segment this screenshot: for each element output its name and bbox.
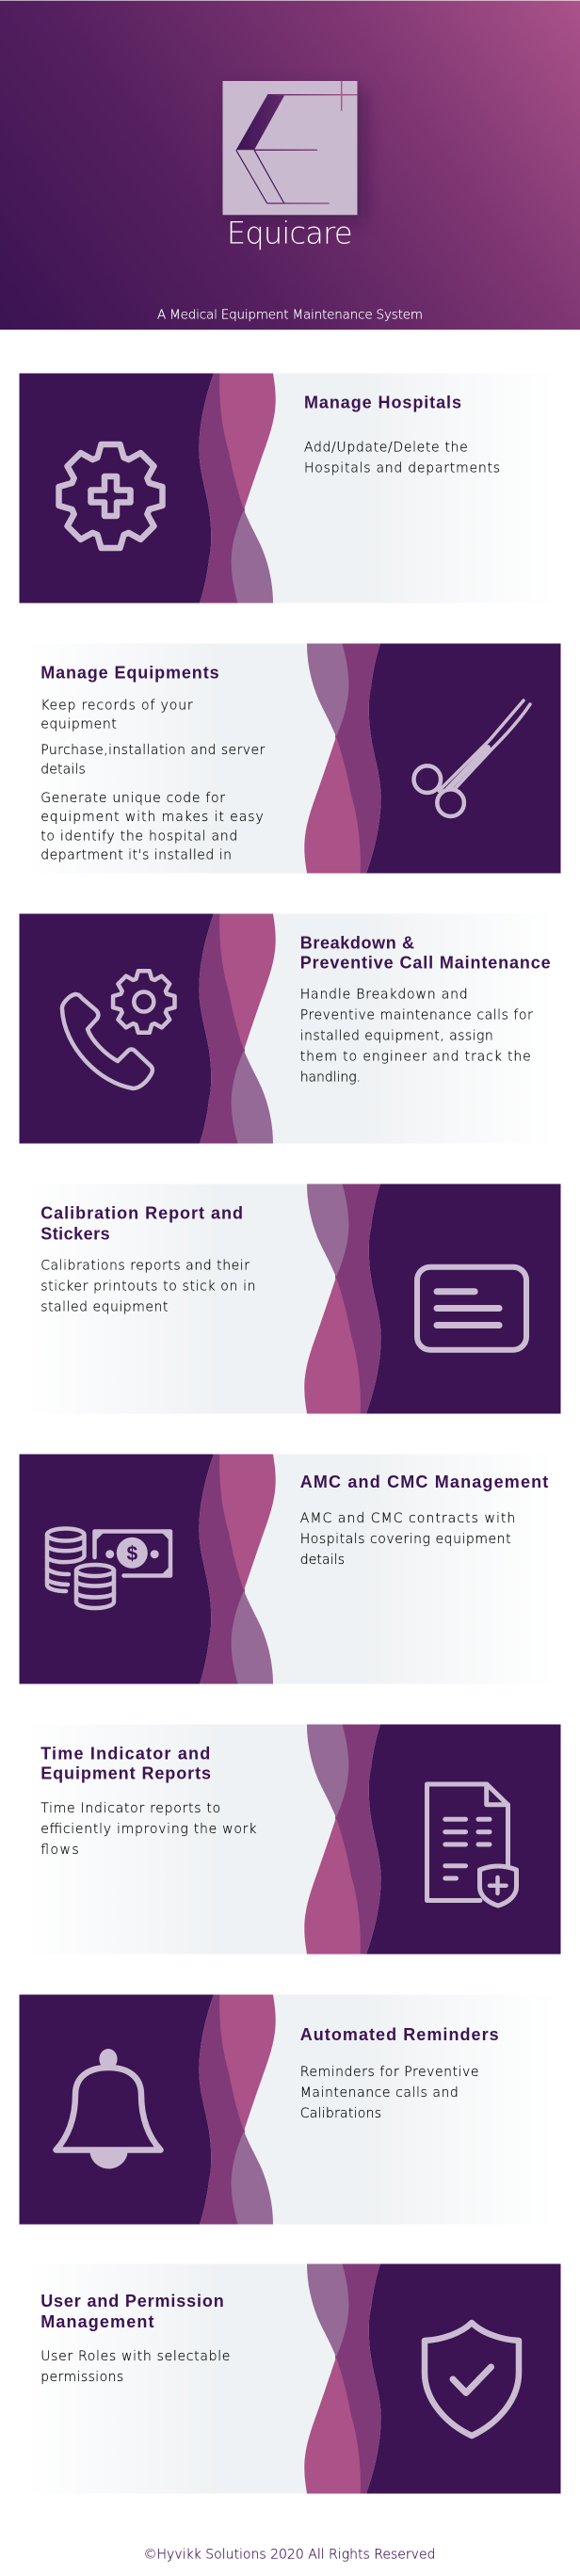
heading: [40, 1744, 211, 1782]
tagline: A Medical Equipment Maintenance System: [157, 307, 423, 322]
heading: Management: [40, 2312, 154, 2331]
description: sticker printouts to stick on in: [40, 1279, 256, 1294]
heading: [40, 1203, 243, 1243]
description: details: [40, 762, 86, 777]
heading: Breakdown &: [300, 933, 414, 952]
description: [300, 1511, 515, 1568]
description: permissions: [40, 2370, 123, 2385]
description: handling.: [300, 1070, 361, 1085]
panel: Manage Hospitals: [19, 373, 561, 603]
description: Generate unique code for: [40, 791, 225, 806]
panel: AMC and CMC Management: [19, 1454, 561, 1683]
heading: Preventive Call Maintenance: [300, 953, 551, 972]
description: Preventive maintenance calls for: [300, 1007, 533, 1022]
icon: shield with check mark: [425, 2323, 519, 2436]
panel: Breakdown and Preventive Call Maintenance: [19, 913, 561, 1143]
description: efficiently improving the work: [40, 1822, 256, 1837]
icon: surgical forceps: [414, 700, 530, 816]
footer copyright: ©Hyvikk Solutions 2020 All Rights Reserved: [143, 2547, 435, 2562]
description: [300, 2065, 478, 2121]
description: Keep records of your: [40, 698, 193, 713]
description: AMC and CMC contracts with: [300, 1511, 515, 1526]
panel: Time Indicator and Equipment Reports: [19, 1725, 561, 1955]
description: Handle Breakdown and: [300, 987, 468, 1002]
logo: [222, 81, 365, 222]
heading: Stickers: [40, 1224, 110, 1243]
description: Reminders for Preventive: [300, 2065, 478, 2080]
description: Maintenance calls and: [300, 2085, 459, 2101]
icon: sticker card: [417, 1267, 526, 1350]
description: [300, 987, 533, 1085]
description: installed equipment, assign: [300, 1028, 493, 1043]
description: [40, 698, 266, 862]
heading: Manage Hospitals: [304, 393, 461, 411]
heading: Calibration Report and: [40, 1203, 243, 1222]
description: [40, 1258, 256, 1314]
heading: [40, 2292, 224, 2331]
description: Hospitals and departments: [304, 460, 500, 475]
icon: report document with shield: [427, 1784, 516, 1906]
description: Purchase,installation and server: [40, 743, 266, 758]
description: stalled equipment: [40, 1299, 168, 1314]
panel: Manage Equipments: [19, 644, 561, 874]
description: them to engineer and track the: [300, 1049, 531, 1064]
heading: [300, 933, 551, 972]
icon: phone with gear: [62, 971, 175, 1088]
heading: Equipment Reports: [40, 1763, 211, 1782]
description: [304, 440, 500, 475]
panel: User and Permission Management: [19, 2263, 561, 2493]
brand name: Equicare: [227, 215, 352, 250]
heading: Automated Reminders: [300, 2025, 499, 2044]
icon: coins and banknote: [47, 1529, 171, 1608]
description: Time Indicator reports to: [40, 1801, 220, 1816]
description: flows: [40, 1843, 79, 1858]
description: Calibrations: [300, 2106, 381, 2121]
icon: bell: [56, 2049, 160, 2169]
description: Hospitals covering equipment: [300, 1532, 511, 1547]
description: User Roles with selectable: [40, 2349, 230, 2364]
description: to identify the hospital and: [40, 829, 237, 844]
heading: Time Indicator and: [40, 1744, 210, 1763]
header banner: [0, 1, 580, 330]
heading: Manage Equipments: [40, 664, 219, 683]
icon: gear with medical cross: [58, 444, 162, 548]
panel: Automated Reminders: [19, 1994, 561, 2224]
description: Calibrations reports and their: [40, 1258, 250, 1273]
description: details: [300, 1553, 345, 1568]
description: [40, 1801, 256, 1858]
description: department it's installed in: [40, 847, 232, 862]
description: [40, 2349, 230, 2385]
heading: AMC and CMC Management: [300, 1473, 548, 1491]
icon: coins and banknote: $: [126, 1543, 137, 1565]
description: equipment with makes it easy: [40, 810, 264, 825]
description: equipment: [40, 716, 117, 732]
panel: Calibration Report and Stickers: [19, 1184, 561, 1414]
heading: User and Permission: [40, 2292, 224, 2310]
description: Add/Update/Delete the: [304, 440, 468, 455]
